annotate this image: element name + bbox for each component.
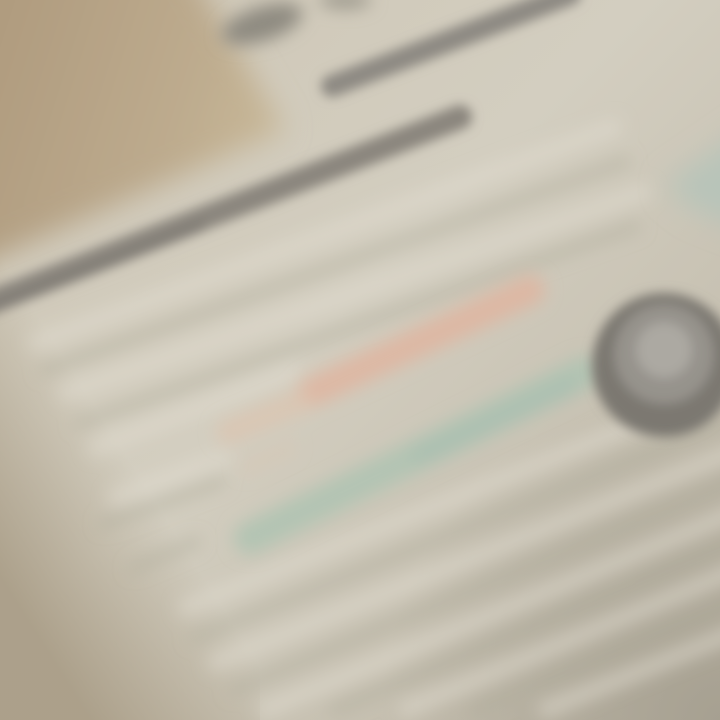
- bottom left vignette: [0, 250, 260, 720]
- green highlighted band: [250, 372, 585, 538]
- small object at top: [217, 0, 371, 53]
- bottom right vignette: [380, 380, 720, 720]
- teal corner at right edge: [665, 120, 720, 235]
- tan desk surface: [0, 0, 285, 300]
- long pen: [0, 117, 460, 320]
- paper lines: diagonal light and shadow stripes: [30, 125, 720, 712]
- pink highlighted band: [228, 290, 530, 468]
- magnifier ring: [592, 293, 720, 437]
- short pen: [332, 0, 570, 86]
